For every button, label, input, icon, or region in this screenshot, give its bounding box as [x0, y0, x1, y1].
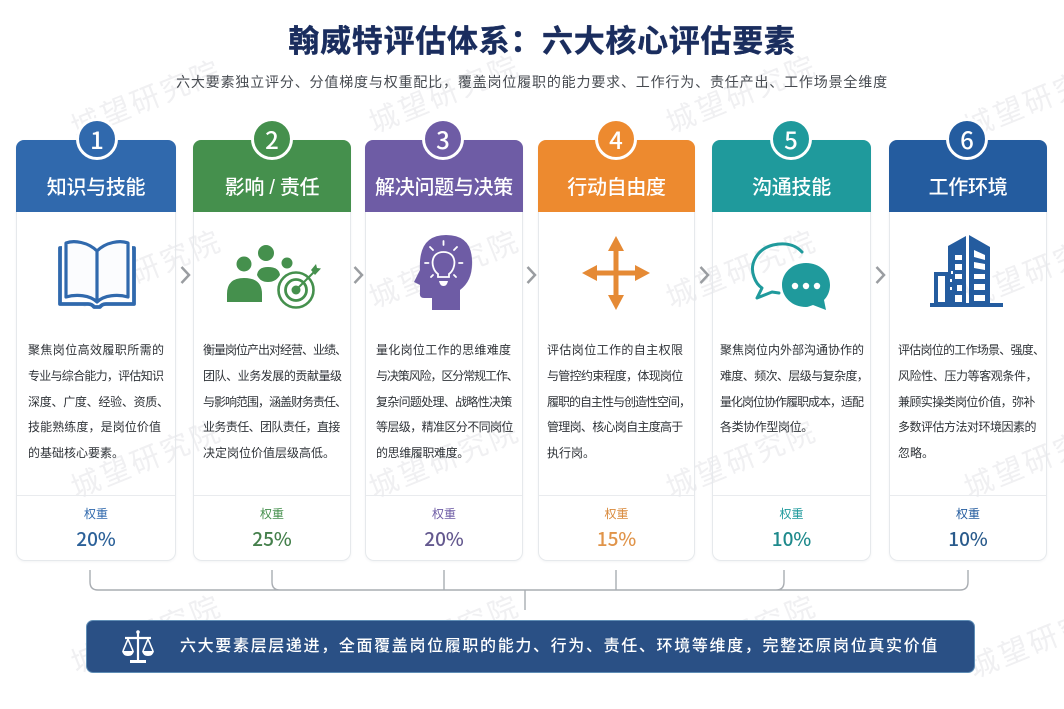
icon: head with light bulb — [414, 235, 472, 310]
panel: 影响/责任 — [193, 121, 351, 562]
panel: 沟通技能 — [712, 121, 871, 562]
weight 15%: 15% — [597, 525, 636, 552]
watermark layer: 城望研究院 — [365, 415, 525, 505]
watermark layer: 城望研究院 — [67, 415, 227, 505]
icon: four-way arrows — [582, 236, 650, 310]
weight 10%: 权重 — [956, 507, 980, 521]
number badge 4: 4 — [609, 121, 623, 156]
heading: 行动自由度 — [538, 140, 695, 212]
description: 团队、业务发展的贡献量级 — [203, 369, 342, 383]
subtitle: 六大要素独立评分、分值梯度与权重配比，覆盖岗位履职的能力要求、工作行为、责任产出、工作场景全维度 — [176, 74, 888, 90]
weight 20% — [76, 507, 116, 552]
description: 复杂问题处理、战略性决策 — [376, 395, 512, 409]
description: 量化岗位工作的思维难度 — [376, 343, 511, 357]
summary banner — [86, 620, 975, 673]
description: 量化岗位协作履职成本，适配 — [720, 395, 863, 409]
description — [203, 343, 346, 460]
watermark layer: 城望研究院 — [67, 55, 227, 145]
description: 业务责任、团队责任，直接 — [203, 420, 340, 434]
number badge 6: 6 — [960, 121, 974, 156]
number badge 2: 2 — [265, 121, 279, 156]
description: 聚焦岗位高效履职所需的 — [28, 343, 164, 357]
watermark layer: 城望研究院 — [67, 225, 227, 315]
icon: team and target — [227, 245, 321, 309]
weight 15% — [597, 507, 636, 552]
arrow: next — [180, 266, 191, 284]
weight 20%: 权重 — [432, 507, 456, 521]
description: 聚焦岗位内外部沟通协作的 — [720, 343, 864, 357]
description: 与管控约束程度，体现岗位 — [547, 369, 683, 383]
watermark layer: 城望研究院 — [67, 590, 227, 680]
watermark layer: 城望研究院 — [365, 225, 525, 315]
description: 等层级，精准区分不同岗位 — [376, 420, 513, 434]
description: 管理岗、核心岗自主度高于 — [547, 420, 683, 434]
panel: 行动自由度 — [538, 121, 695, 562]
description: 的思维履职难度。 — [376, 446, 469, 460]
weight 25%: 25% — [252, 525, 292, 552]
weight 10% — [948, 507, 988, 552]
description: 与决策风险，区分常规工作、 — [376, 369, 518, 383]
watermark layer: 城望研究院 — [662, 590, 822, 680]
description: 决定岗位价值层级高低。 — [203, 446, 335, 460]
panel: 工作环境 — [889, 118, 1047, 562]
description: 兼顾实操类岗位价值，弥补 — [898, 395, 1035, 409]
watermark layer: 城望研究院 — [365, 50, 525, 140]
description: 履职的自主性与创造性空间， — [547, 395, 690, 409]
weight 10% — [772, 507, 811, 552]
arrow: next — [354, 266, 364, 284]
weight 10%: 权重 — [779, 507, 804, 521]
number badge 3 — [422, 118, 464, 160]
description: 深度、广度、经验、资质、 — [28, 395, 169, 409]
description: 与影响范围，涵盖财务责任、 — [203, 395, 346, 409]
panel: 知识与技能 — [16, 118, 176, 562]
number badge 2 — [251, 118, 293, 160]
heading: 工作环境: 工作环境 — [929, 177, 1007, 199]
description: 评估岗位工作的自主权限 — [547, 343, 683, 357]
description — [898, 343, 1044, 460]
description — [720, 343, 868, 434]
weight 15%: 权重 — [604, 507, 628, 521]
icon: balance scale — [122, 630, 154, 663]
number badge 3: 3 — [436, 121, 450, 156]
number badge 5 — [770, 118, 812, 160]
description: 难度、频次、层级与复杂度， — [720, 369, 868, 383]
heading: 知识与技能: 知识与技能 — [47, 177, 145, 199]
description: 多数评估方法对环境因素的 — [898, 420, 1036, 434]
heading: 沟通技能: 沟通技能 — [752, 177, 831, 199]
heading: 知识与技能 — [16, 140, 176, 212]
number badge 1: 1 — [90, 121, 104, 156]
description: 各类协作型岗位。 — [720, 420, 813, 434]
arrow: next — [876, 266, 886, 284]
weight 20%: 20% — [424, 525, 464, 552]
heading: 影响/责任: 影响 / 责任 — [225, 177, 319, 199]
title: 翰威特评估体系：六大核心评估要素 — [288, 24, 796, 59]
heading: 解决问题与决策 — [365, 140, 523, 212]
weight 25% — [252, 507, 292, 552]
weight 10%: 10% — [948, 525, 988, 552]
icon: chat bubbles — [750, 242, 830, 310]
description: 评估岗位的工作场景、强度、 — [898, 343, 1044, 357]
heading: 影响/责任 — [193, 140, 351, 212]
description: 的基础核心要素。 — [28, 446, 124, 460]
number badge 4 — [595, 118, 637, 160]
weight 10%: 10% — [772, 525, 811, 552]
watermark layer: 城望研究院 — [662, 50, 822, 140]
weight 25%: 权重 — [260, 507, 284, 521]
description: 忽略。 — [898, 446, 934, 460]
watermark layer: 城望研究院 — [365, 590, 525, 680]
weight 20% — [424, 507, 464, 552]
heading: 沟通技能 — [712, 140, 871, 212]
weight 20%: 20% — [76, 525, 116, 552]
heading: 行动自由度: 行动自由度 — [567, 177, 666, 199]
description: 风险性、压力等客观条件， — [898, 369, 1037, 383]
number badge 1 — [76, 118, 118, 160]
panel: 解决问题与决策 — [365, 121, 523, 562]
arrow: next — [700, 266, 710, 284]
banner text: 六大要素层层递进，全面覆盖岗位履职的能力、行为、责任、环境等维度，完整还原岗位真实价值 — [180, 638, 939, 655]
description: 技能熟练度，是岗位价值 — [28, 420, 161, 434]
weight 20%: 权重 — [84, 507, 108, 521]
number badge 6 — [946, 118, 988, 160]
description: 专业与综合能力，评估知识 — [28, 369, 163, 383]
description — [547, 343, 690, 460]
bracket connector — [89, 570, 969, 610]
arrow: next — [526, 266, 537, 284]
icon: open book — [58, 240, 136, 309]
description — [376, 343, 518, 460]
description: 衡量岗位产出对经营、业绩、 — [203, 343, 346, 357]
number badge 5: 5 — [784, 121, 798, 156]
description: 执行岗。 — [547, 446, 595, 460]
heading: 解决问题与决策: 解决问题与决策 — [375, 177, 513, 199]
watermark layer: 城望研究院 — [662, 225, 822, 315]
heading: 工作环境 — [889, 140, 1047, 212]
watermark layer: 城望研究院 — [662, 415, 822, 505]
icon: office building — [930, 235, 1003, 307]
description — [28, 343, 169, 460]
